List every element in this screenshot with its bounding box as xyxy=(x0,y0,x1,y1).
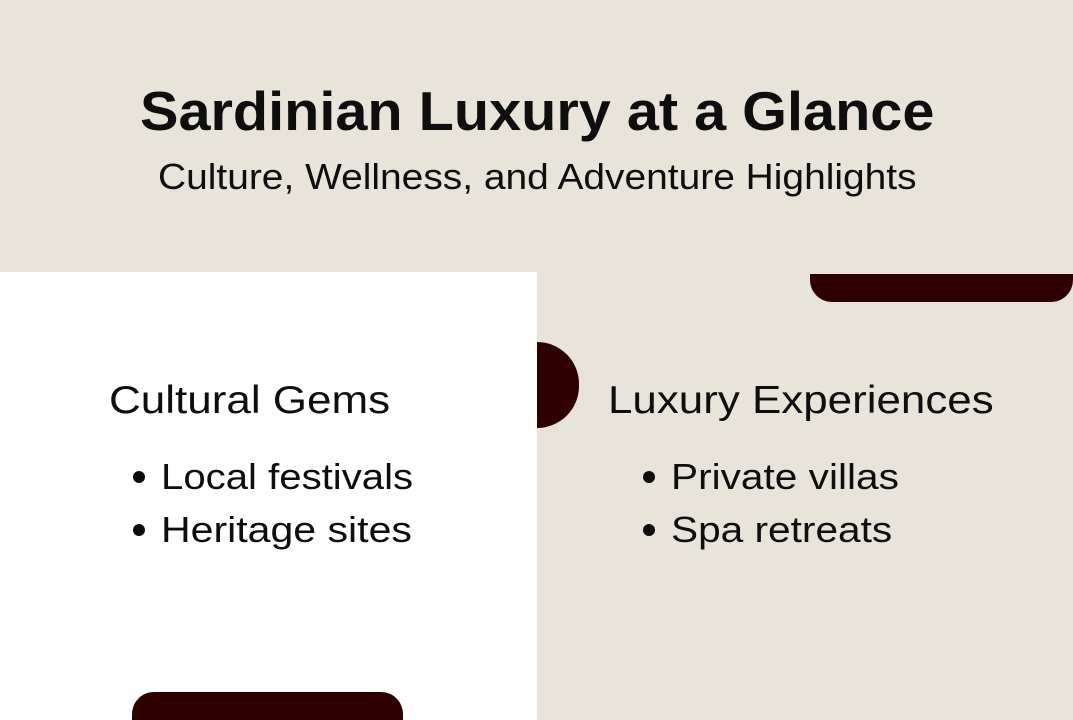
heading: luxury experiences: Luxury Experiences xyxy=(608,379,994,422)
title: Sardinian Luxury at a Glance xyxy=(140,80,934,142)
list: luxury experiences xyxy=(643,456,899,550)
list item: spa retreats: Spa retreats xyxy=(671,509,892,550)
list item: private villas: Private villas xyxy=(671,456,899,497)
heading: cultural gems: Cultural Gems xyxy=(109,379,390,422)
decorative tab: top right xyxy=(810,274,1073,302)
list: cultural gems xyxy=(133,456,413,550)
decorative half circle xyxy=(537,342,579,428)
list item: local festivals: Local festivals xyxy=(161,456,413,497)
list item: heritage sites: Heritage sites xyxy=(161,509,412,550)
subtitle: Culture, Wellness, and Adventure Highlights xyxy=(158,156,917,197)
panel: cultural gems xyxy=(0,272,537,720)
decorative tab: bottom xyxy=(132,692,403,720)
